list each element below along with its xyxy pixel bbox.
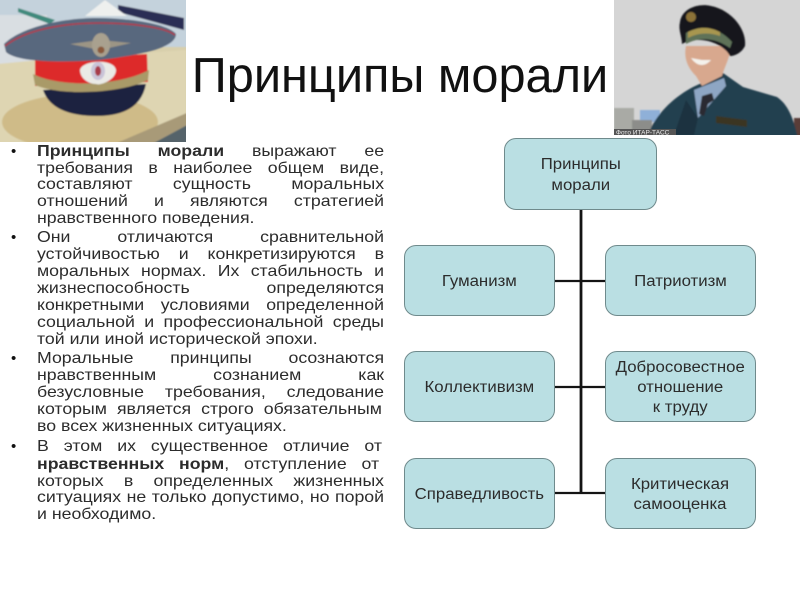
paragraph 1: Принципы морали выражают ее bbox=[37, 143, 384, 160]
org chart bbox=[404, 138, 756, 529]
box: collectivism bbox=[404, 351, 555, 422]
paragraph 1: составляют сущность моральных bbox=[37, 176, 384, 193]
paragraph 4 bbox=[11, 438, 384, 523]
connector lines bbox=[555, 210, 605, 494]
paragraph 2: конкретными условиями определенной bbox=[37, 297, 384, 314]
paragraph 4: которых в определенных жизненных bbox=[37, 473, 384, 490]
box: patriotism bbox=[605, 245, 756, 316]
photo: officer's cap bbox=[0, 0, 186, 142]
box: collectivism: Коллективизм bbox=[425, 379, 534, 396]
paragraph 2: устойчивостью и конкретизируются в bbox=[37, 246, 384, 263]
box: conscientious attitude to work: Добросовестное bbox=[616, 359, 745, 376]
paragraph 4: и необходимо. bbox=[37, 506, 156, 523]
paragraph 4: ситуациях не только допустимо, но порой bbox=[37, 489, 384, 506]
paragraph 3: которым является строго обязательным bbox=[37, 401, 382, 418]
paragraph 3: нравственным сознанием как bbox=[37, 367, 384, 384]
box: self-criticism bbox=[605, 458, 756, 529]
paragraph 1: требования в наиболее общем виде, bbox=[37, 160, 384, 177]
paragraph 2: жизнеспособность определяются bbox=[37, 280, 384, 297]
box: conscientious attitude to work: к труду bbox=[653, 399, 708, 416]
paragraph 1: • bbox=[11, 143, 16, 160]
box: patriotism: Патриотизм bbox=[634, 273, 727, 290]
paragraph 2 bbox=[11, 229, 384, 348]
paragraph 2: • bbox=[11, 229, 16, 246]
box: root bbox=[504, 138, 657, 210]
paragraph 3 bbox=[11, 350, 384, 435]
box: root: морали bbox=[551, 176, 610, 194]
paragraph 2: той или иной исторической эпохи. bbox=[37, 331, 318, 348]
paragraph 3: во всех жизненных ситуациях. bbox=[37, 418, 287, 435]
paragraph 1: отношений и являются стратегией bbox=[37, 193, 384, 210]
box: self-criticism: Критическая bbox=[631, 476, 730, 493]
paragraph 4: • bbox=[11, 438, 16, 455]
title: Принципы морали bbox=[192, 49, 608, 103]
box: conscientious attitude to work bbox=[605, 351, 756, 422]
paragraph 3: безусловные требования, следование bbox=[37, 384, 384, 401]
paragraph 3: Моральные принципы осознаются bbox=[37, 350, 384, 367]
box: root: Принципы bbox=[540, 156, 621, 173]
box: self-criticism: самооценка bbox=[634, 496, 727, 513]
photo: smiling officer bbox=[614, 0, 800, 135]
paragraph 1: нравственного поведения. bbox=[37, 210, 254, 227]
paragraph 4: нравственных норм, отступление от bbox=[37, 456, 379, 473]
paragraph 2: социальной и профессиональной среды bbox=[37, 314, 384, 331]
paragraph 2: Они отличаются сравнительной bbox=[37, 229, 384, 246]
text panel: principles of morality bbox=[11, 143, 384, 523]
paragraph 3: • bbox=[11, 350, 16, 367]
box: humanism: Гуманизм bbox=[442, 273, 517, 290]
box: humanism bbox=[404, 245, 555, 316]
box: justice: Справедливость bbox=[415, 486, 544, 503]
paragraph 2: моральных нормах. Их стабильность и bbox=[37, 263, 384, 280]
paragraph 1 bbox=[11, 143, 384, 227]
paragraph 4: В этом их существенное отличие от bbox=[37, 438, 382, 455]
box: conscientious attitude to work: отношение bbox=[637, 379, 723, 396]
box: justice bbox=[404, 458, 555, 529]
